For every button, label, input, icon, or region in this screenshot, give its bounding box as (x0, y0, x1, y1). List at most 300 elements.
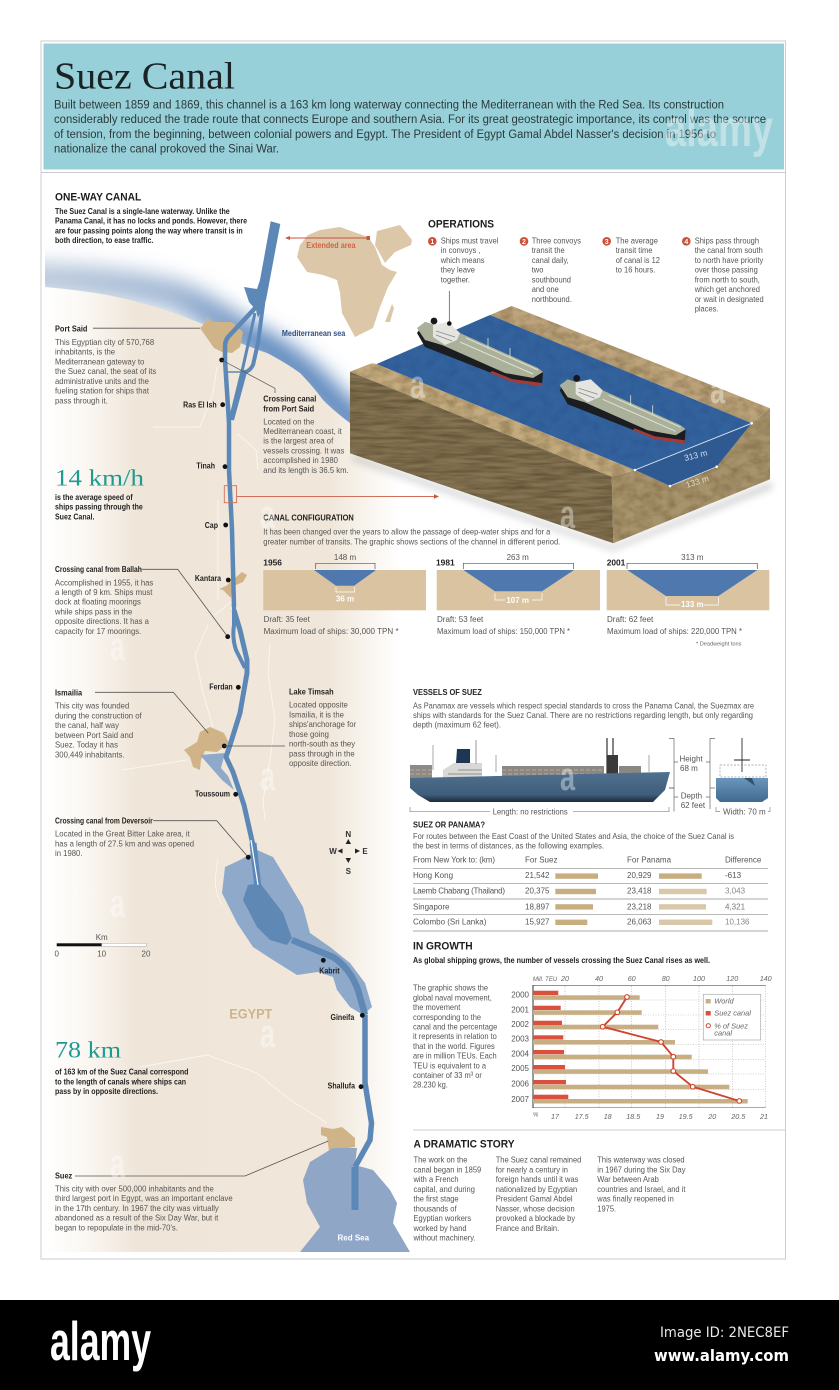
stock watermark letters: a (260, 755, 276, 799)
stat: 14 km/h: is the average speed of (55, 493, 133, 502)
top axis labels: 100 (693, 974, 705, 983)
top axis labels: 80 (662, 974, 670, 983)
row: Laemb Chabang: 23,418 (627, 887, 652, 896)
Port Said callout (55, 324, 200, 405)
city: Suez (321, 1127, 355, 1151)
stock watermark letters: a (560, 755, 576, 799)
stat: 78 km (55, 1037, 189, 1096)
a dramatic story panel: A DRAMATIC STORY (414, 1138, 515, 1151)
intro paragraph: considerably reduced the trade route that connects Europe and southern Asia. For its great geostrategic importance, its control was the source (54, 114, 766, 126)
step 2: southbound (532, 275, 571, 284)
bottom axis labels: 17.5 (575, 1112, 590, 1121)
place labels along the canal (183, 400, 365, 1091)
step 4: the canal from south (695, 246, 763, 255)
Suez callout: third largest port in Egypt, was an important enclave (55, 1194, 233, 1203)
Ismailia callout (55, 688, 208, 759)
section 2001: 2001 (607, 558, 626, 568)
stat: 14 km/h: ships passing through the (55, 502, 143, 512)
row: Colombo (413, 917, 750, 926)
canal configuration panel: It has been changed over the years to allow the passage of deep-water ships and for a (263, 526, 551, 536)
step 4: places. (695, 304, 719, 314)
place labels along the canal: Cap (205, 521, 218, 530)
explanatory text: corresponding to the (413, 1012, 482, 1022)
section 1981: 1981 (436, 558, 455, 568)
explanatory text: global naval movement, (413, 993, 492, 1003)
city: Kantara (219, 572, 247, 598)
story column 2: The Suez canal remained (496, 1155, 581, 1165)
story column 2: provoked a blockade by (496, 1214, 575, 1223)
section 1956: 36 m (336, 594, 354, 603)
bottom axis labels (533, 1112, 768, 1121)
Ismailia callout: the canal, half way (55, 721, 120, 730)
footnote: * Deadweight tons (696, 642, 742, 648)
label: Mediterranean sea: Mediterranean sea (282, 329, 346, 338)
Lake Timsah callout (222, 687, 356, 768)
Lake Timsah callout: ships'anchorage for (289, 720, 356, 729)
canal configuration panel (263, 513, 769, 648)
explanatory text: TEU is equivalent to a (413, 1061, 487, 1070)
dimension: height and depth (669, 738, 715, 812)
Little Bitter Lake deep basin (243, 883, 292, 945)
explanatory text: The graphic shows the (413, 983, 489, 993)
story column 2: for nearly a century in (496, 1165, 568, 1175)
stock watermark letters: a (260, 493, 276, 537)
Great Bitter Lake (222, 850, 372, 1015)
story column 1: thousands of (414, 1204, 457, 1214)
Port Said callout: fueling station for ships that (55, 386, 150, 396)
Lake Timsah callout: opposite direction. (289, 759, 352, 768)
dimension: length (410, 807, 669, 816)
explanatory text: container of 33 m³ or (413, 1071, 482, 1080)
year labels: 2005 (511, 1064, 530, 1073)
Suez callout: abandoned as a result of the Six Day War, but it (55, 1213, 219, 1223)
place labels along the canal: Shallufa (328, 1081, 356, 1091)
bottom axis labels: 19 (656, 1112, 664, 1121)
front-left face (350, 372, 613, 543)
label: Red Sea: Red Sea (338, 1234, 370, 1243)
vessels of Suez panel: ships with standards for the Suez Canal. There are no restrictions regarding length, but only regarding (413, 711, 753, 720)
legend (703, 994, 761, 1040)
in growth panel (413, 940, 772, 1121)
step 1 (428, 236, 499, 326)
stat: 14 km/h: 14 km/h (55, 466, 145, 491)
story column 3: War between Arab (597, 1175, 659, 1184)
bottom axis labels: 20.5 (730, 1112, 746, 1121)
website: www.alamy.com (654, 1346, 789, 1365)
Deversoir crossing callout: in 1980. (55, 849, 82, 858)
legend: World (714, 996, 734, 1005)
Suez callout: Suez (55, 1171, 72, 1180)
a dramatic story panel (413, 1130, 785, 1243)
vessels of Suez panel: depth (maximum 62 feet). (413, 720, 501, 730)
step 2: two (532, 265, 544, 275)
Crossing canal from Port Said callout: Mediterranean coast, it (263, 427, 343, 436)
explanatory text: are in million TEUs. Each (413, 1051, 497, 1061)
table header: For Panama (627, 856, 672, 865)
section 1956: 1956 (263, 558, 282, 568)
compass rose: E (362, 847, 368, 856)
scale bar: 20 (142, 950, 151, 959)
place labels along the canal: Kantara (195, 574, 222, 583)
Port Said callout: administrative units and the (55, 377, 149, 386)
section 2001 (607, 553, 769, 636)
scale bar: 10 (97, 950, 107, 959)
row: Laemb Chabang: Laemb Chabang (Thailand) (413, 887, 505, 896)
Ismailia callout: between Port Said and (55, 731, 133, 740)
Suez callout (55, 1141, 328, 1233)
story column 1: capital, and during (414, 1185, 475, 1194)
Ballah crossing callout (54, 564, 230, 639)
place labels along the canal: Tinah (196, 461, 215, 471)
stock watermark letters: a (110, 1142, 126, 1186)
row: Laemb Chabang: 3,043 (725, 887, 746, 896)
step 1: together. (441, 275, 470, 284)
table header: Difference (725, 856, 762, 865)
bottom axis labels: % (533, 1112, 539, 1118)
locator map: Africa and Arabia (285, 225, 412, 337)
Lake Timsah callout: Located opposite (289, 700, 348, 710)
Deversoir crossing callout: Located in the Great Bitter Lake area, it (55, 829, 190, 839)
section 1956: 148 m (334, 553, 356, 562)
one-way canal heading and intro: are four passing points along the way where transit is in (55, 226, 243, 236)
step 4: over those passing (695, 265, 758, 275)
place labels along the canal: Toussoum (195, 789, 230, 798)
top axis labels: 140 (760, 974, 772, 983)
world bars (533, 995, 748, 1104)
title: Suez Canal (54, 56, 235, 98)
step 4: which get anchored (694, 285, 760, 294)
row: Laemb Chabang (413, 887, 746, 896)
Crossing canal from Port Said callout: is the largest area of (263, 436, 334, 446)
section 1981: Draft: 53 feet (437, 615, 484, 624)
right face (612, 408, 770, 543)
top axis labels: 20 (560, 974, 569, 983)
Crossing canal from Port Said callout: and its length is 36.5 km. (263, 466, 349, 475)
step 3: The average (616, 236, 658, 245)
story column 3: in 1967 during the Six Day (597, 1165, 685, 1175)
step 3 (602, 236, 661, 275)
explanatory text: the movement (413, 1003, 461, 1012)
story column 3: 1975. (597, 1204, 616, 1214)
Crossing canal from Port Said callout: from Port Said (263, 404, 314, 414)
year labels: 2002 (511, 1020, 530, 1029)
section 1981: Maximum load of ships: 150,000 TPN * (437, 627, 570, 636)
Ismailia callout: during the construction of (55, 711, 142, 721)
canal configuration panel: CANAL CONFIGURATION (263, 513, 354, 523)
Ismailia callout: Ismailia (55, 688, 83, 698)
Suez canal bars (533, 991, 568, 1099)
Ismailia callout: 300,449 inhabitants. (55, 750, 125, 759)
Suez or Panama table (413, 820, 768, 931)
step 4: or wait in designated (695, 294, 764, 304)
step 3: of canal is 12 (616, 255, 661, 265)
year labels: 2004 (511, 1050, 530, 1058)
story column 2: President Gamal Abdel (496, 1194, 573, 1204)
vessels of Suez panel: As Panamax are vessels which respect special standards to cross the Panama Canal, the Suezmax are (413, 702, 755, 710)
scale bar: 0 (54, 950, 59, 959)
extended area arrow: Extended area (306, 241, 356, 250)
story column 2: nationalized by Egyptian (496, 1185, 577, 1194)
3D canal block (350, 306, 772, 550)
footer logo: alamy (50, 1310, 151, 1372)
stock watermark letters: a (560, 493, 576, 537)
year labels: 2001 (511, 1006, 530, 1014)
legend: canal (714, 1029, 732, 1038)
story column 3: countries and Israel, and it (597, 1185, 686, 1194)
dimension: height and depth: Depth (681, 792, 702, 800)
step 3: 3 (605, 239, 609, 246)
Suez callout: began to repopulate in the mid-70's. (55, 1223, 178, 1233)
top axis labels: 120 (726, 974, 738, 983)
stock watermark letters: a (260, 1012, 276, 1056)
dimension: height and depth: Height (680, 754, 703, 764)
stat: 78 km: of 163 km of the Suez Canal correspond (55, 1067, 189, 1077)
step 2: transit the (532, 246, 565, 255)
Ballah crossing callout: Crossing canal from Ballah (55, 564, 142, 574)
story column 3: was finally reopened in (596, 1194, 674, 1204)
intro paragraph: Built between 1859 and 1869, this channel is a 163 km long waterway connecting the Mediterranean with the Red Sea. Its construction (54, 99, 724, 111)
stat: 14 km/h: Suez Canal. (55, 512, 94, 522)
land background (45, 287, 430, 1252)
Port Said callout: Port Said (55, 324, 88, 334)
Suez or Panama table: the best in terms of distances, as the following examples. (413, 842, 604, 850)
Ballah crossing callout: a length of 9 km. Ships must (55, 588, 153, 597)
one-way canal heading and intro: both direction, to ease traffic. (55, 236, 153, 245)
legend: Suez canal (714, 1008, 751, 1017)
stock watermark letters: a (410, 363, 426, 407)
row: Singapore: Singapore (413, 902, 450, 911)
section 1981: 107 m (506, 596, 529, 605)
header panel (41, 44, 786, 172)
story column 2: foreign hands until it was (496, 1175, 578, 1184)
section 2001: Maximum load of ships: 220,000 TPN * (607, 627, 742, 636)
section 2001: Draft: 62 feet (607, 615, 654, 624)
year labels: 2007 (511, 1095, 530, 1104)
row: Hong Kong: -613 (725, 871, 742, 880)
year labels (511, 990, 530, 1104)
measure markers (634, 422, 753, 487)
stat: 78 km: pass by in opposite directions. (55, 1087, 158, 1096)
Deversoir crossing callout: has a length of 27.5 km and was opened (55, 839, 194, 849)
Ballah crossing callout: Accomplished in 1955, it has (55, 578, 153, 587)
Suez Canal route (225, 221, 372, 1210)
Port Said callout: pass through it. (55, 396, 108, 405)
step 1: 1 (430, 239, 434, 246)
year labels: 2003 (511, 1034, 530, 1044)
Lake Timsah callout: north-south as they (289, 739, 356, 749)
one-way canal heading and intro (55, 191, 247, 245)
top axis labels: Mill. TEU (533, 977, 558, 983)
Port Said callout: inhabitants, is the (55, 347, 116, 357)
watermark: alamy (665, 100, 773, 158)
step 2: Three convoys (532, 236, 581, 245)
place labels along the canal: Ferdan (209, 682, 233, 691)
row: Singapore: 18,897 (525, 902, 550, 911)
outer frame (41, 41, 786, 1259)
table header: For Suez (525, 856, 557, 865)
section 1981: 263 m (507, 553, 529, 562)
step 4: from north to south, (695, 275, 760, 284)
step 2: canal daily, (532, 255, 569, 265)
bottom axis labels: 17 (551, 1112, 560, 1121)
Suez or Panama table: SUEZ OR PANAMA? (413, 820, 485, 830)
block shadow (352, 455, 772, 550)
stock watermark letters (110, 363, 726, 1186)
dimension: height and depth: 62 feet (681, 801, 706, 810)
compass rose: W (329, 847, 337, 856)
place labels along the canal: Gineifa (330, 1013, 355, 1022)
operations panel (428, 218, 764, 326)
step 2: 2 (522, 239, 526, 246)
row: Colombo: 15,927 (525, 917, 550, 926)
near bank (350, 363, 635, 477)
top axis labels (533, 974, 772, 983)
chart (511, 974, 772, 1121)
step 4 (682, 236, 764, 314)
row: Hong Kong: Hong Kong (413, 871, 453, 880)
map panel (45, 221, 410, 1252)
section 1956 (263, 553, 426, 636)
compass rose: S (346, 867, 352, 876)
year labels: 2000 (511, 990, 530, 1000)
Lake Timsah callout: Lake Timsah (289, 687, 334, 697)
Ballah crossing callout: opposite directions. It has a (55, 617, 149, 626)
Ballah crossing callout: while ships pass in the (54, 607, 133, 617)
step 2: and one (532, 285, 559, 294)
step 4: Ships pass through (695, 236, 759, 245)
section 1956: Maximum load of ships: 30,000 TPN * (264, 627, 399, 636)
bottom axis labels: 21 (759, 1112, 768, 1121)
story column 1: without machinery. (413, 1233, 476, 1243)
in growth panel: As global shipping grows, the number of vessels crossing the Suez Canal rises as well. (413, 956, 710, 965)
section locator box and arrow (224, 486, 439, 503)
dimension: length: Length: no restrictions (493, 807, 568, 816)
explanatory text: 28.230 kg. (413, 1080, 448, 1090)
Suez callout: This city with over 500,000 inhabitants and the (55, 1184, 214, 1193)
step 3: transit time (616, 246, 653, 255)
one-way canal heading and intro: Panama Canal, it has no locks and ponds. However, there (55, 216, 247, 226)
section 2001: 133 m (681, 600, 704, 609)
city: Port Said (200, 317, 243, 353)
Ballah crossing callout: capacity for 17 moorings. (55, 627, 141, 636)
Lake Timsah (200, 753, 234, 790)
Deversoir crossing callout (55, 816, 251, 860)
story column 1: The work on the (414, 1155, 468, 1165)
stat: 78 km: to the length of canals where ships can (55, 1077, 186, 1087)
legend: % of Suez (714, 1021, 748, 1030)
place labels along the canal: Kabrit (319, 966, 340, 976)
row: Singapore: 4,321 (725, 902, 746, 911)
bottom axis labels: 18.5 (626, 1112, 641, 1121)
dimension: width: Width: 70 m (723, 807, 766, 816)
place labels along the canal: Ras El Ish (183, 400, 217, 409)
Crossing canal from Port Said callout: Crossing canal (263, 394, 316, 404)
story column 2: Nasser, whose decision (496, 1204, 575, 1214)
Crossing canal from Port Said callout: accomplished in 1980 (263, 456, 338, 465)
step 2 (520, 236, 581, 304)
step 4: 4 (684, 239, 688, 246)
image id: Image ID: 2NEC8EF (660, 1325, 789, 1341)
water surface (377, 315, 752, 470)
row: Hong Kong (413, 871, 742, 880)
top axis labels: 60 (628, 974, 636, 983)
Deversoir crossing callout: Crossing canal from Deversoir (55, 816, 153, 826)
step 1: Ships must travel (441, 236, 499, 245)
in growth panel: IN GROWTH (413, 940, 473, 952)
row: Singapore (413, 902, 746, 911)
Crossing canal from Port Said callout (219, 358, 349, 475)
Ballah crossing callout: dock at floating moorings (55, 597, 141, 607)
step 3: to 16 hours. (616, 265, 655, 275)
row: Singapore: 23,218 (627, 902, 652, 911)
bottom axis labels: 18 (604, 1112, 612, 1121)
Port Said callout: Mediterranean gateway to (55, 357, 145, 367)
top axis labels: 40 (595, 974, 603, 983)
grid (533, 986, 766, 1108)
row: Colombo: Colombo (Sri Lanka) (413, 917, 487, 926)
Lake Timsah callout: pass through in the (289, 749, 355, 758)
one-way canal heading and intro: ONE-WAY CANAL (55, 191, 142, 204)
tanker 2 (560, 375, 686, 444)
story column 1: Egyptian workers (414, 1214, 471, 1223)
Crossing canal from Port Said callout: Located on the (263, 417, 315, 426)
section 1981 (436, 553, 600, 636)
row: Colombo: 26,063 (627, 917, 652, 926)
container ship front view (716, 738, 768, 802)
canal configuration panel: greater number of transits. The graphic shows sections of the channel in different period. (263, 536, 560, 546)
stat: 14 km/h (55, 466, 145, 522)
compass rose (329, 830, 368, 876)
scale bar: Km (96, 933, 108, 942)
step 1: in convoys , (441, 246, 480, 255)
story column 1: canal began in 1859 (414, 1165, 482, 1175)
row: Hong Kong: 20,929 (627, 871, 652, 880)
step 1: they leave (441, 265, 475, 275)
sea gradient (45, 252, 350, 423)
Ismailia callout: Suez. Today it has (55, 740, 118, 750)
Ismailia callout: This city was founded (55, 701, 129, 711)
story column 1: the first stage (414, 1194, 459, 1204)
stock watermark letters: a (710, 368, 726, 412)
step 4: to north have priority (695, 255, 763, 265)
roads (122, 367, 327, 1123)
Port Said callout: the Suez canal, the seat of its (55, 367, 156, 376)
vessels of Suez panel (410, 688, 770, 816)
water cross-section (635, 423, 752, 486)
label: 313 m: 313 m (683, 448, 708, 463)
far bank (490, 306, 770, 423)
Lake Timsah callout: those going (289, 730, 329, 739)
operations panel: OPERATIONS (428, 218, 494, 231)
explanatory text: canal and the percentage (413, 1022, 498, 1032)
Lake Timsah callout: Ismailia, it is the (289, 710, 344, 720)
Suez or Panama table: For routes between the East Coast of the United States and Asia, the choice of the Suez Canal is (413, 832, 734, 841)
intro paragraph (54, 99, 766, 155)
container ship side view (410, 738, 670, 802)
stock watermark letters: a (110, 882, 126, 926)
compass rose: N (345, 830, 351, 839)
Suez callout: in the 17th century. In 1967 the city was virtually (55, 1204, 220, 1213)
Crossing canal from Port Said callout: vessels crossing. It was (263, 446, 344, 456)
Red Sea (300, 1148, 410, 1252)
label: 133 m: 133 m (685, 473, 710, 490)
city: Ismailia (184, 727, 229, 770)
table header: From New York to: (km) (413, 856, 495, 865)
step 1: which means (440, 255, 485, 265)
story column 1: with a French (413, 1175, 459, 1184)
Port Said callout: This Egyptian city of 570,768 (55, 338, 155, 347)
stock watermark letters: a (110, 625, 126, 669)
